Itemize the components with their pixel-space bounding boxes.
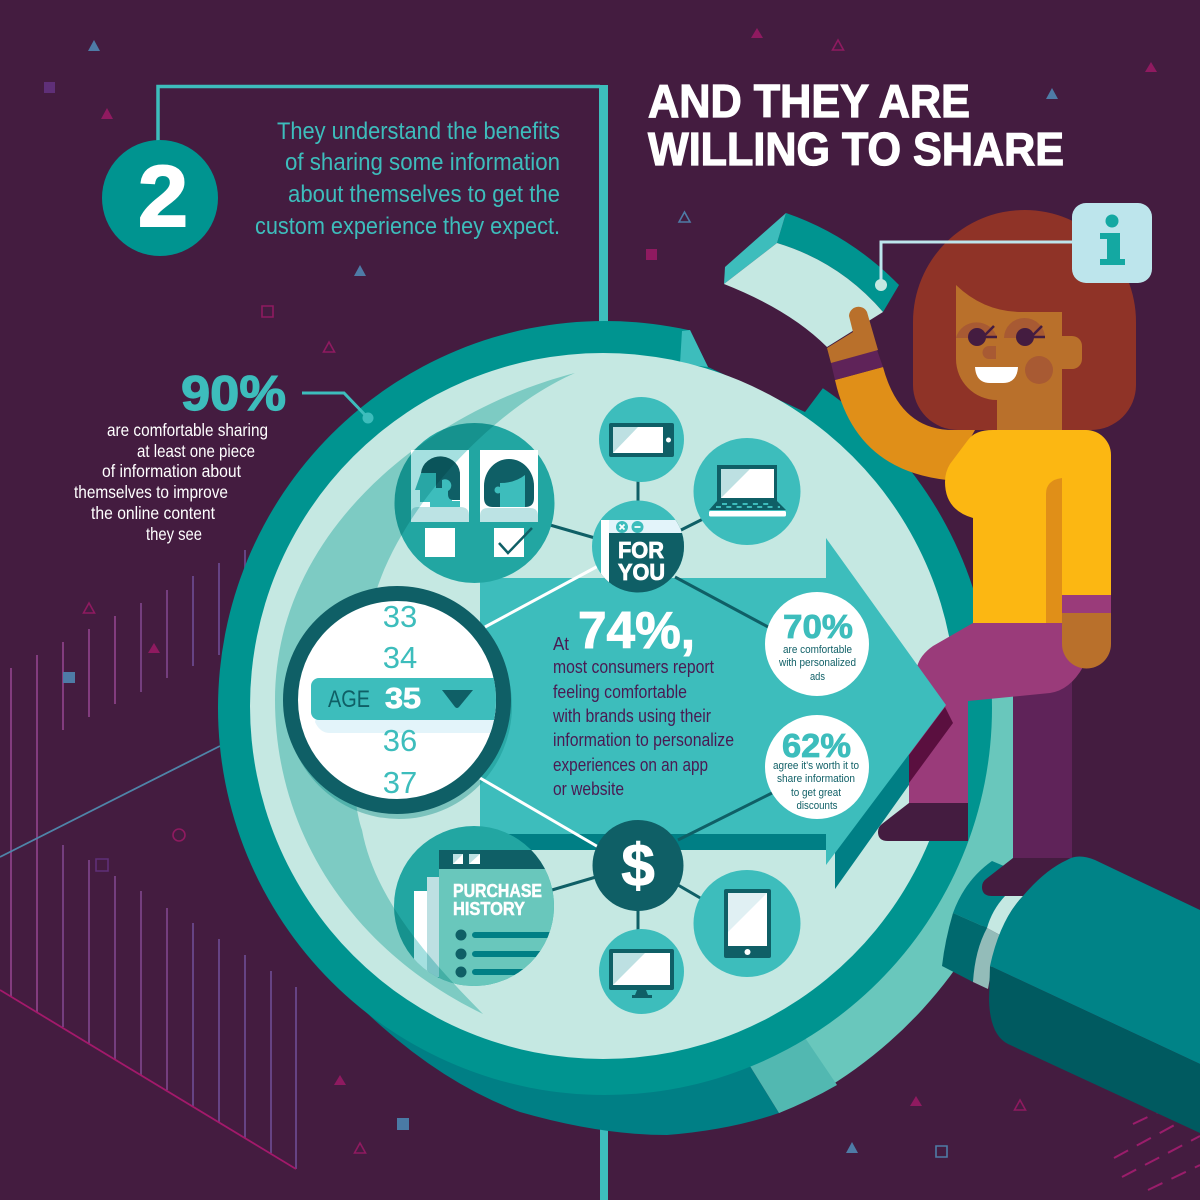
main statistic 74%: experiences on an app	[553, 755, 708, 775]
magnifier handle	[942, 856, 1200, 1133]
62% callout: discounts	[796, 800, 838, 812]
arrow shadow	[480, 707, 953, 889]
70% callout: ads	[810, 671, 825, 683]
dollar circle: $	[621, 832, 655, 899]
for you circle: YOU	[618, 559, 665, 585]
profile card left	[411, 450, 469, 557]
wristband	[831, 350, 883, 380]
character: woman	[831, 210, 1136, 858]
back shoe	[982, 858, 1072, 896]
info callout	[875, 203, 1152, 291]
decorative line chart pattern	[0, 550, 296, 1169]
90% leader line	[302, 393, 374, 424]
handle collar	[942, 861, 1030, 989]
main statistic 74%: or website	[553, 779, 624, 799]
70% callout: are comfortable	[783, 644, 852, 656]
intro text: They understand the benefits	[277, 118, 560, 145]
lowered hand and cuff	[1062, 595, 1111, 668]
profile card right	[480, 450, 538, 557]
purchase history circle: HISTORY	[453, 899, 525, 919]
lens glass	[250, 353, 956, 1059]
purchase history circle: PURCHASE	[453, 881, 542, 901]
crescent overlay on profile circle	[394, 423, 494, 536]
arrow shadow on leg	[909, 707, 953, 783]
face and neck	[956, 285, 1082, 432]
62% callout	[765, 715, 869, 819]
lifted lens fragment	[724, 213, 899, 347]
magnifier age selector: AGE	[328, 686, 370, 713]
eyes	[956, 318, 1045, 346]
magnifier age selector	[290, 594, 511, 806]
magnifier age selector: 37	[383, 765, 417, 800]
62% callout: share information	[777, 773, 855, 785]
magnifier age selector: 34	[383, 640, 417, 675]
hair	[913, 210, 1136, 430]
main statistic 74%: most consumers report	[553, 657, 714, 677]
62% callout: agree it's worth it to	[773, 760, 859, 772]
magnifier age selector: 36	[383, 723, 417, 758]
intro text: of sharing some information	[285, 149, 560, 176]
main statistic 74%: 74%,	[578, 602, 695, 660]
intro text	[255, 118, 560, 240]
intro text: custom experience they expect.	[255, 213, 560, 240]
main statistic 74%: with brands using their	[552, 706, 711, 726]
90% statistic: 90%	[181, 367, 286, 421]
main statistic 74%	[552, 602, 734, 799]
intro text: about themselves to get the	[288, 181, 560, 208]
monitor circle	[599, 929, 684, 1014]
mouth	[975, 367, 1018, 383]
bottom connector line	[600, 1120, 608, 1200]
raised hand	[827, 307, 878, 363]
profile selection circle	[394, 423, 554, 583]
tablet landscape circle	[599, 397, 684, 482]
62% callout: 62%	[782, 727, 851, 764]
inner arm	[1046, 478, 1062, 625]
dollar circle	[592, 820, 684, 911]
crescent overlay on purchase circle	[394, 908, 454, 984]
70% callout	[765, 592, 869, 696]
front shoe	[878, 803, 968, 841]
back leg	[1013, 670, 1072, 858]
main statistic 74%: At	[553, 634, 569, 654]
number badge: 2	[138, 149, 188, 245]
title: AND THEY ARE	[648, 75, 970, 127]
title	[648, 75, 1064, 175]
connector lines	[480, 480, 772, 932]
arrow	[480, 538, 946, 865]
nose and cheek	[983, 346, 1053, 384]
handle grip	[989, 856, 1200, 1133]
main statistic 74%: information to personalize	[553, 730, 734, 750]
90% statistic: are comfortable sharing	[107, 420, 268, 440]
90% statistic: themselves to improve	[74, 482, 228, 502]
magnifier shadow	[286, 593, 512, 819]
number badge	[102, 140, 218, 256]
main statistic 74%: feeling comfortable	[553, 682, 687, 702]
for you circle	[592, 500, 684, 592]
connector line from number badge	[158, 85, 608, 330]
90% statistic: of information about	[102, 461, 241, 481]
90% statistic	[74, 367, 286, 544]
for you circle: FOR	[618, 537, 664, 563]
tablet portrait circle	[694, 870, 800, 977]
raised arm	[835, 367, 975, 480]
90% statistic: at least one piece	[137, 441, 255, 461]
90% statistic: the online content	[91, 503, 215, 523]
magnifier age selector: 33	[383, 599, 417, 634]
pants	[909, 623, 1083, 803]
purchase history circle	[394, 826, 554, 986]
70% callout: 70%	[783, 608, 853, 645]
magnifier age selector: 35	[385, 683, 421, 715]
90% statistic: they see	[146, 524, 202, 544]
title: WILLING TO SHARE	[648, 123, 1064, 175]
lens rear ring	[330, 690, 1013, 1135]
70% callout: with personalized	[778, 657, 856, 669]
lens teal ring	[218, 300, 992, 1095]
laptop circle	[694, 438, 800, 545]
62% callout: to get great	[791, 787, 841, 799]
lens crescent highlight	[275, 373, 575, 1014]
shirt	[945, 430, 1111, 625]
